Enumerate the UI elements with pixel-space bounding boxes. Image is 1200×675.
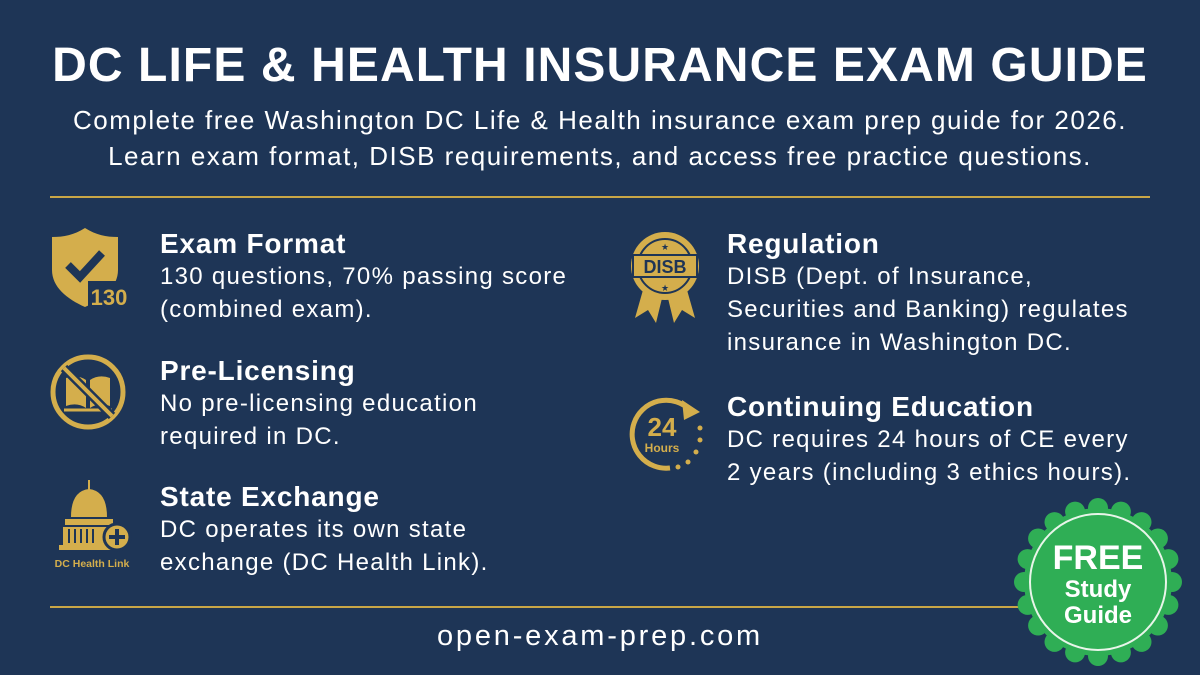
- item: regulation: Securities and Banking) regulates: [727, 296, 1129, 323]
- icon: DISB seal: DISB: [643, 257, 687, 277]
- item: continuing education: [727, 391, 1131, 486]
- icon: 24 hours: [630, 398, 702, 471]
- item: state exchange: DC operates its own state: [160, 516, 467, 543]
- item: state exchange: [160, 481, 489, 576]
- item: exam format: 130 questions, 70% passing score: [160, 263, 567, 290]
- icon: DISB seal: ★: [661, 283, 669, 293]
- item: exam format: [160, 228, 567, 323]
- item: state exchange: exchange (DC Health Link).: [160, 549, 489, 576]
- icon: 24 hours: Hours: [645, 441, 680, 455]
- item: continuing education: DC requires 24 hours of CE every: [727, 426, 1129, 453]
- icon: shield 130: 130: [91, 285, 127, 310]
- item: exam format: (combined exam).: [160, 296, 373, 323]
- item: continuing education: Continuing Education: [727, 391, 1034, 422]
- badge: free study guide: [1014, 498, 1182, 666]
- icon: shield 130: [52, 228, 127, 310]
- icon: DISB seal: ★: [661, 242, 669, 252]
- item: regulation: insurance in Washington DC.: [727, 329, 1072, 356]
- icon: no book: [50, 354, 126, 430]
- title: DC LIFE & HEALTH INSURANCE EXAM GUIDE: [52, 39, 1148, 92]
- icon: 24 hours: 24: [648, 412, 677, 442]
- item: regulation: [727, 228, 1129, 356]
- item: pre-licensing: required in DC.: [160, 423, 341, 450]
- item: pre-licensing: [160, 355, 478, 450]
- item: regulation: DISB (Dept. of Insurance,: [727, 263, 1033, 290]
- item: state exchange: State Exchange: [160, 481, 380, 512]
- subtitle: Complete free Washington DC Life & Health insurance exam prep guide for 2026.: [73, 105, 1127, 135]
- item: pre-licensing: No pre-licensing education: [160, 390, 478, 417]
- item: exam format: Exam Format: [160, 228, 346, 259]
- badge: free study guide: Guide: [1064, 602, 1132, 629]
- item: continuing education: 2 years (including 3 ethics hours).: [727, 459, 1131, 486]
- badge: free study guide: Study: [1065, 576, 1132, 603]
- badge: free study guide: FREE: [1053, 539, 1143, 577]
- item: regulation: Regulation: [727, 228, 880, 259]
- subtitle: Learn exam format, DISB requirements, and access free practice questions.: [108, 141, 1092, 171]
- subtitle: [73, 105, 1127, 171]
- item: pre-licensing: Pre-Licensing: [160, 355, 356, 386]
- icon: DISB seal: [631, 232, 699, 323]
- footer url: open-exam-prep.com: [437, 620, 763, 652]
- icon: capitol DC Health Link: [55, 480, 130, 570]
- icon: capitol DC Health Link: DC Health Link: [55, 558, 129, 570]
